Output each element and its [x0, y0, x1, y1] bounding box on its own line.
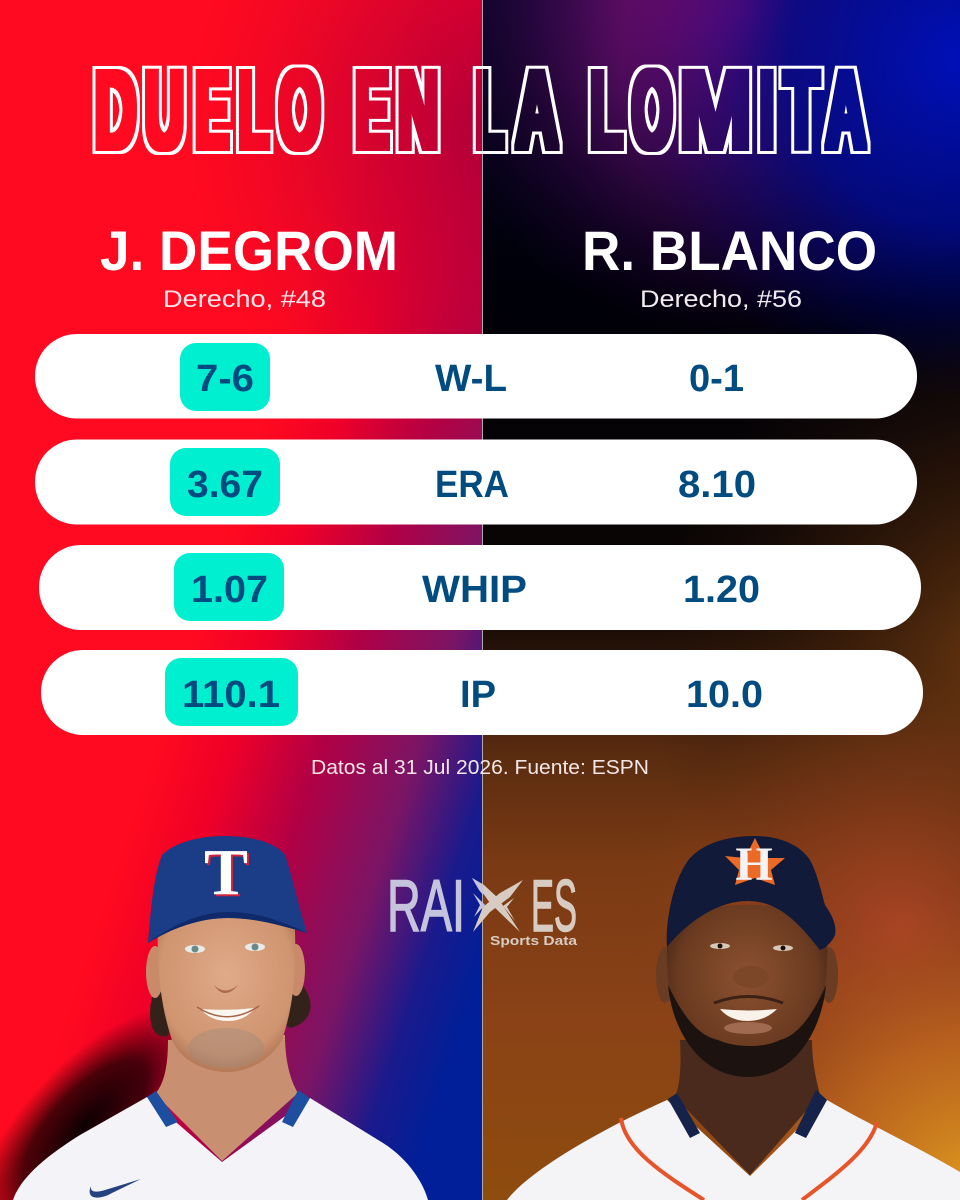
cap: [148, 836, 307, 943]
stat row: WHIP: 1.07: [191, 569, 268, 611]
stat row: IP: IP: [460, 674, 496, 716]
neck: [675, 1040, 820, 1175]
ears: [146, 946, 164, 998]
cap logo: star and H: H: [735, 838, 773, 891]
stat row: WHIP: [39, 545, 921, 630]
player photo: Jacob deGrom: [13, 836, 428, 1200]
title: L: [476, 49, 504, 172]
player heading: R. Blanco: [582, 219, 877, 313]
mouth: [201, 1008, 255, 1021]
logo: Raixes Sports Data: [387, 866, 578, 948]
face: [667, 905, 827, 1076]
player heading: R. Blanco: R. BLANCO: [582, 219, 877, 282]
title: L: [239, 49, 269, 172]
jersey: [13, 1097, 428, 1200]
orange piping: [621, 1118, 877, 1200]
text: ES: [531, 866, 577, 947]
cap: [667, 836, 835, 950]
cap logo: star and H: [725, 838, 785, 891]
title: A: [826, 49, 866, 172]
player photo: Jacob deGrom: T: [204, 836, 248, 909]
title: N: [398, 49, 438, 172]
title: O: [632, 49, 672, 172]
hair behind face: [150, 975, 311, 1036]
player heading: J. DeGrom: [100, 219, 398, 313]
stat row: IP: 110.1: [182, 674, 280, 716]
neck: [155, 1035, 298, 1161]
title: T: [784, 49, 819, 172]
stubble: [188, 1028, 264, 1068]
ears: [656, 947, 674, 1003]
stat row: ERA: [35, 440, 917, 524]
face: [158, 910, 295, 1072]
stat row: W-L: 7-6: [196, 358, 254, 400]
cap brim shade: [148, 912, 307, 943]
title: L: [590, 49, 623, 172]
collar: [668, 1090, 827, 1138]
title: U: [145, 49, 184, 172]
title: M: [679, 49, 752, 172]
stat row: W-L: 0-1: [689, 358, 744, 400]
title: E: [355, 49, 389, 172]
title: [95, 49, 866, 172]
background: left red-blue panel: [0, 0, 482, 1200]
player heading: R. Blanco: Derecho, #56: [640, 286, 802, 313]
logo: Raixes Sports Data: RAI: [387, 866, 465, 947]
source note: Datos al 31 Jul 2026. Fuente: ESPN: [311, 757, 649, 779]
nose: [733, 966, 769, 988]
logo: Raixes Sports Data: Sports Data: [490, 934, 578, 948]
stat row: ERA: 3.67: [187, 464, 263, 506]
stat row: ERA: ERA: [435, 464, 509, 506]
nose: [214, 985, 238, 993]
background: right dark-orange panel: [482, 0, 960, 1200]
stat row: W-L: W-L: [435, 358, 507, 400]
mustache: [714, 996, 783, 1003]
eyes: [710, 943, 730, 949]
player photo: Ronel Blanco: [507, 836, 960, 1200]
player heading: J. DeGrom: J. DEGROM: [100, 219, 398, 282]
stat row: W-L: [35, 334, 917, 418]
stat row: WHIP: WHIP: [422, 569, 527, 611]
cap logo: T: T: [206, 838, 250, 911]
title: O: [279, 49, 321, 172]
beard: [668, 985, 826, 1077]
mouth: [720, 1009, 777, 1021]
stat row: IP: 10.0: [686, 674, 763, 716]
nike swoosh: [90, 1179, 141, 1198]
stat row: IP: [41, 650, 923, 735]
jersey: [507, 1100, 960, 1200]
stat row: ERA: 8.10: [678, 464, 756, 506]
stat row: WHIP: 1.20: [683, 569, 760, 611]
title: D: [95, 49, 136, 172]
title: E: [195, 49, 229, 172]
title: I: [760, 49, 774, 172]
player heading: J. DeGrom: Derecho, #48: [163, 286, 326, 313]
collar: [147, 1090, 310, 1127]
title: A: [516, 49, 557, 172]
eyes: [185, 945, 205, 953]
